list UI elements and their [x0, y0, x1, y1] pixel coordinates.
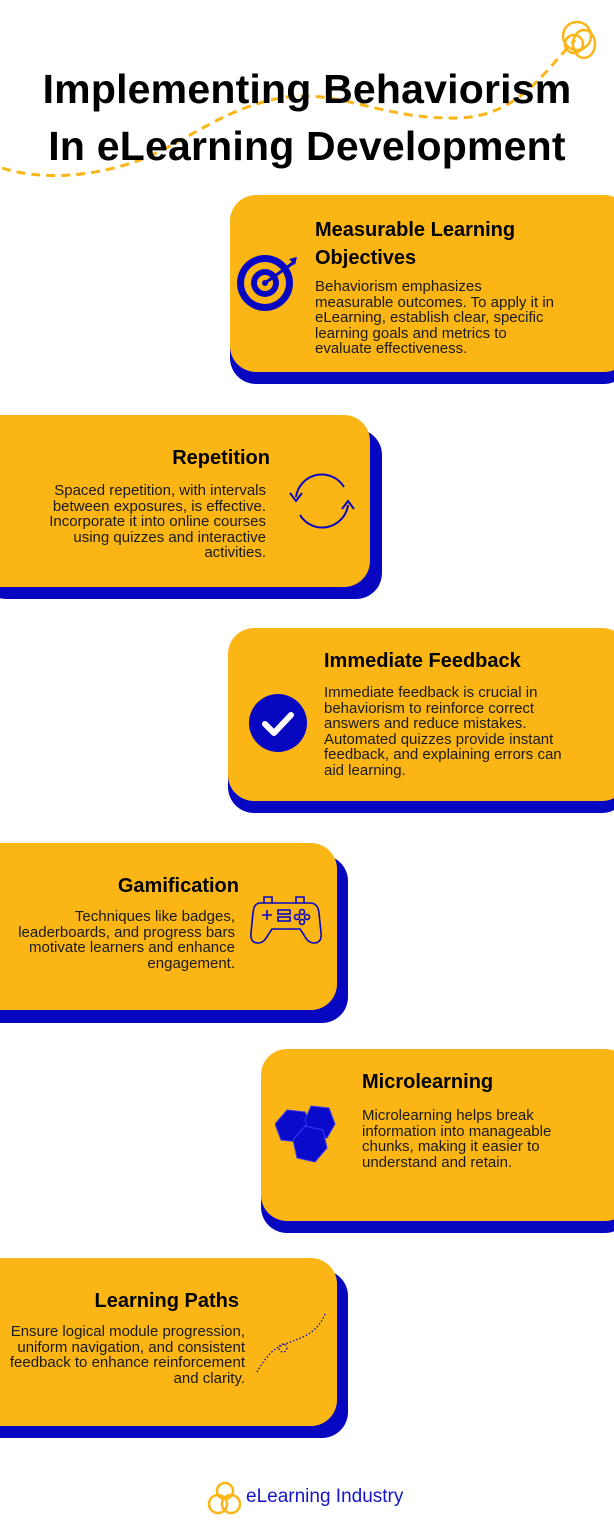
footer logo [208, 1482, 404, 1514]
text: activities. [204, 544, 266, 561]
heading: Objectives [315, 247, 416, 269]
icon: gamepad [250, 896, 322, 944]
text: measurable outcomes. To apply it in [315, 294, 554, 310]
text: engagement. [147, 954, 235, 972]
text: Automated quizzes provide instant [324, 730, 553, 748]
text: Techniques like badges, [75, 908, 235, 925]
text: feedback to enhance reinforcement [10, 1354, 245, 1371]
panel: repetition [0, 415, 382, 599]
decorative dashed path with logo [2, 20, 596, 178]
title: Implementing Behaviorism [43, 66, 571, 112]
panel: learning paths [0, 1258, 348, 1438]
text: Spaced repetition, with intervals [54, 482, 266, 499]
text: Immediate feedback is crucial in [324, 684, 537, 701]
text [362, 1107, 551, 1170]
text [18, 908, 235, 972]
text: understand and retain. [362, 1154, 512, 1170]
title: In eLearning Development [48, 123, 566, 169]
text: aid learning. [324, 762, 406, 778]
text: chunks, making it easier to [362, 1138, 540, 1155]
heading: Measurable Learning [315, 219, 515, 241]
text: motivate learners and enhance [29, 939, 235, 956]
heading: Gamification [118, 875, 239, 897]
text: behaviorism to reinforce correct [324, 700, 534, 716]
text: feedback, and explaining errors can [324, 746, 562, 763]
icon: target [237, 255, 297, 311]
heading: Learning Paths [95, 1290, 239, 1312]
text: eLearning, establish clear, specific [315, 309, 543, 326]
text: Incorporate it into online courses [49, 513, 266, 530]
icon: check [249, 694, 307, 752]
title [43, 66, 571, 169]
heading: Immediate Feedback [324, 650, 521, 672]
panel: microlearning [261, 1049, 614, 1233]
text: leaderboards, and progress bars [18, 924, 235, 940]
footer logo: eLearning Industry [246, 1486, 403, 1507]
text: using quizzes and interactive [73, 528, 266, 546]
text [315, 278, 554, 357]
text [324, 684, 562, 778]
text: Microlearning helps break [362, 1107, 534, 1124]
heading: Microlearning [362, 1071, 493, 1093]
heading: Repetition [172, 447, 270, 469]
icon: dotted path [256, 1314, 326, 1372]
text: evaluate effectiveness. [315, 340, 467, 357]
text: between exposures, is effective. [53, 498, 266, 514]
panel: measurable learning objectives [230, 195, 614, 384]
text [49, 482, 266, 561]
text: answers and reduce mistakes. [324, 715, 527, 732]
icon: cubes [275, 1106, 336, 1162]
panel: immediate feedback [228, 628, 614, 813]
icon: circular arrows [289, 474, 355, 528]
heading [315, 219, 515, 269]
text: Ensure logical module progression, [11, 1323, 245, 1340]
text [10, 1323, 245, 1386]
text: learning goals and metrics to [315, 324, 507, 342]
text: information into manageable [362, 1122, 551, 1140]
text: Behaviorism emphasizes [315, 278, 482, 295]
text: uniform navigation, and consistent [17, 1338, 245, 1356]
panel: gamification [0, 843, 348, 1023]
text: and clarity. [174, 1370, 245, 1386]
